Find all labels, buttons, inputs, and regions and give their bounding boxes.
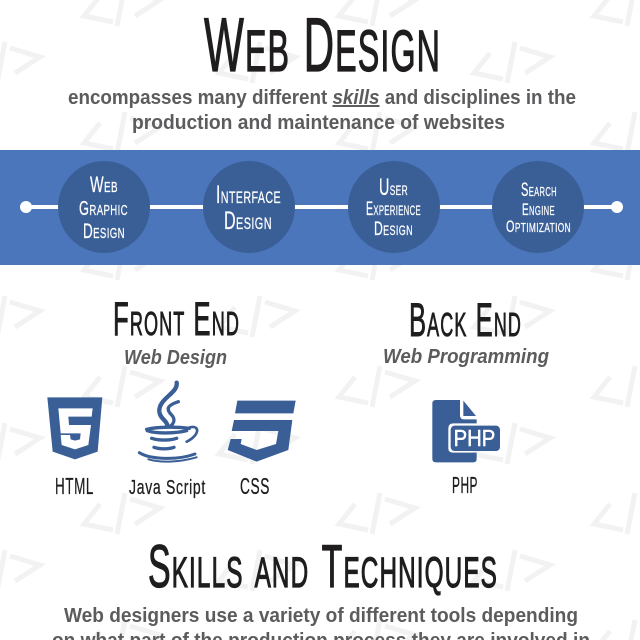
timeline line: [20, 201, 623, 213]
icon: html5 shield: [47, 397, 102, 459]
circle: search engine optimization: OPTIMIZATION: [506, 217, 571, 236]
intro text: [68, 87, 576, 134]
circle: search engine optimization: ENGINE: [522, 200, 555, 219]
heading: skills and techniques: SKILLS AND TECHNIQUES: [148, 533, 498, 600]
circle: web graphic design: WEB: [90, 172, 118, 197]
panel: disciplines banner: [0, 150, 640, 265]
subheading: web programming: Web Programming: [383, 346, 549, 368]
circle: interface design: INTERFACE: [216, 181, 281, 209]
intro text: production and maintenance of websites: [132, 112, 505, 134]
icon: java cup: [139, 383, 197, 462]
heading: back end: BACK END: [409, 293, 522, 346]
label: java script: Java Script: [129, 477, 206, 499]
intro text: encompasses many different skills and disciplines in the: [68, 87, 576, 109]
circle: interface design: [203, 161, 295, 253]
icon: php file: [432, 400, 500, 462]
circle: user experience design: DESIGN: [374, 219, 413, 240]
circle: web graphic design: [58, 161, 150, 253]
label: html: HTML: [55, 473, 94, 499]
paragraph: skills text: Web designers use a variety of different tools depending: [64, 605, 578, 627]
circle: search engine optimization: [492, 161, 584, 253]
circle: interface design: DESIGN: [224, 207, 272, 235]
circle: search engine optimization: SEARCH: [521, 180, 557, 201]
heading: front end: FRONT END: [113, 292, 240, 345]
circle: user experience design: EXPERIENCE: [366, 199, 421, 220]
circle: user experience design: [348, 161, 440, 253]
icon: css3 shield: [228, 401, 296, 462]
icon: php file: PHP: [454, 425, 495, 451]
paragraph: skills text: [52, 605, 590, 640]
circle: web graphic design: DESIGN: [83, 220, 125, 243]
subheading: web design: Web Design: [124, 347, 227, 369]
circle: user experience design: USER: [379, 174, 408, 201]
circle: web graphic design: GRAPHIC: [79, 198, 128, 220]
title: WEB DESIGN: [204, 3, 441, 88]
label: php: PHP: [452, 472, 478, 498]
label: css: CSS: [240, 473, 270, 499]
